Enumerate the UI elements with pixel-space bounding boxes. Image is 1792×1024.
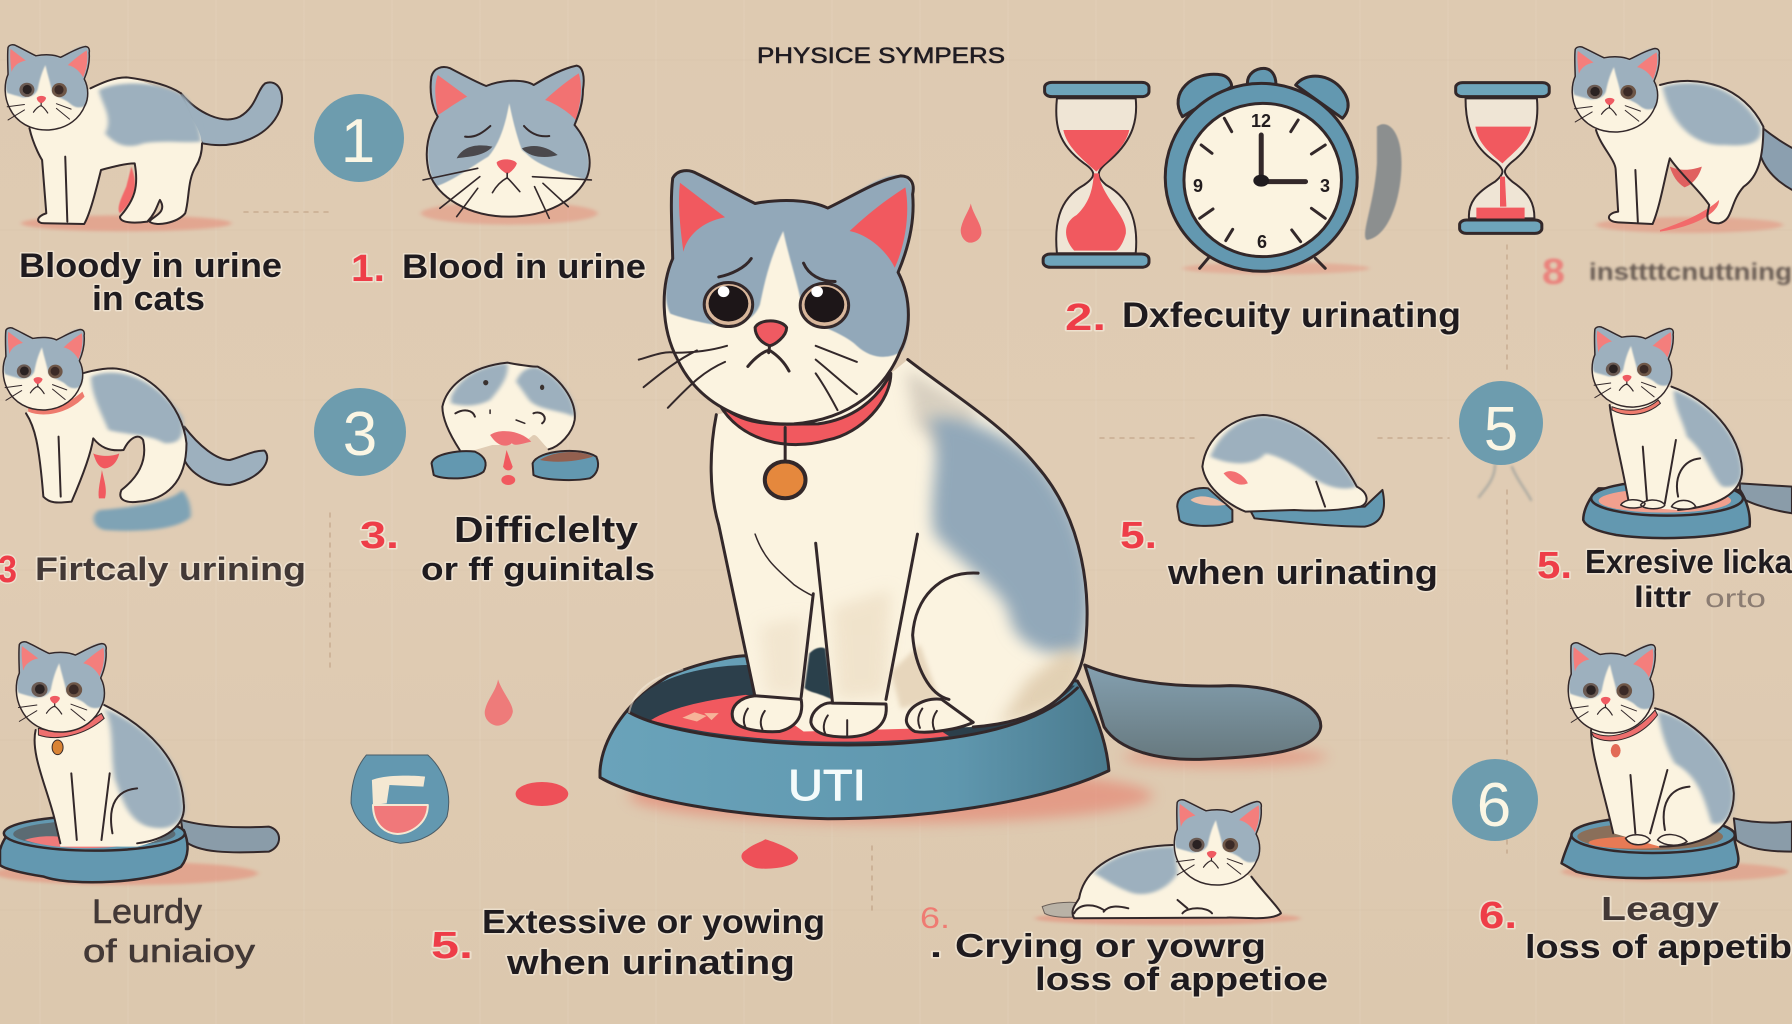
label: 2. Dxfecuity urinating: Dxfecuity urinating: [1122, 296, 1461, 335]
label: 6. Crying or yowrg loss of appetioe: [920, 902, 1328, 997]
label: blurred right label: insttttcnuttning: [1589, 259, 1792, 286]
label: 5. when urinating: [1120, 515, 1438, 592]
label: 6. Leagy loss of appetib: [1479, 890, 1792, 965]
label: blurred right label: [1542, 251, 1792, 292]
label: 5. Extessive or yowing when urinating: Extessive or yowing: [482, 903, 825, 940]
label: Leurdy of uniaioy: of uniaioy: [83, 933, 255, 969]
label: Bloody in urine in cats: Bloody in urine: [19, 247, 282, 285]
label: 3. Firtcaly urining: [0, 549, 306, 591]
illustration: hunched cat over tray: [1177, 415, 1384, 527]
label: 6. Leagy loss of appetib: loss of appetib: [1525, 928, 1792, 965]
number badge 3: 3: [343, 400, 377, 469]
icon: alarm clock: 9: [1193, 176, 1203, 196]
number badge 1: [314, 94, 404, 182]
icon: alarm clock: 12: [1251, 111, 1271, 131]
icon: small hourglass: [1456, 83, 1549, 233]
label: 3. Difficlelty or ff guinitals: Difficlelty: [454, 509, 638, 550]
label: 5. Extessive or yowing when urinating: 5.: [431, 925, 473, 967]
label: 5. Exresive licka littr orto: [1537, 543, 1792, 614]
label: 5. when urinating: when urinating: [1167, 554, 1438, 592]
label: 6. Crying or yowrg loss of appetioe: Crying or yowrg: [955, 927, 1266, 964]
title: PHYSICE SYMPERS: [757, 43, 1005, 68]
label: UTI: UTI: [788, 761, 866, 810]
number badge 5: [1459, 381, 1543, 500]
illustration: crying cat face: [421, 66, 598, 225]
number badge 5: 5: [1484, 395, 1518, 464]
icon: alarm clock: 6: [1257, 232, 1267, 252]
label: 6. Crying or yowrg loss of appetioe: 6.: [920, 902, 950, 935]
illustration: lying cat: [1035, 800, 1301, 925]
icon: blood drops: [485, 679, 798, 869]
label: 3. Difficlelty or ff guinitals: [360, 509, 655, 587]
label: 6. Crying or yowrg loss of appetioe: loss of appetioe: [1035, 961, 1328, 997]
illustration: cat head bowed over bowls: [432, 363, 598, 485]
icon: large hourglass: [1043, 82, 1149, 267]
icon: blood sample cup: [351, 755, 449, 843]
number badge 6: [1452, 759, 1538, 841]
illustration: cat sitting in tray, bottom right: [1562, 643, 1792, 882]
label: 3. Difficlelty or ff guinitals: 3.: [360, 515, 399, 557]
label: Bloody in urine in cats: in cats: [92, 280, 205, 318]
label: Leurdy of uniaioy: [83, 893, 255, 969]
number badge 6: 6: [1477, 771, 1511, 840]
label: 5. Exresive licka littr orto: 5.: [1537, 545, 1572, 587]
label: 5. when urinating: 5.: [1120, 515, 1157, 557]
label: 6. Leagy loss of appetib: 6.: [1479, 895, 1517, 937]
icon: alarm clock: 3: [1320, 176, 1330, 196]
label: Leurdy of uniaioy: Leurdy: [92, 893, 202, 931]
label: 3. Firtcaly urining: Firtcaly urining: [35, 551, 306, 587]
icon: blood drop near main cat: [961, 203, 981, 243]
label: 5. Exresive licka littr orto: orto: [1705, 583, 1766, 613]
label: 1. Blood in urine: 1.: [351, 248, 385, 290]
illustration: cat sitting in tray, middle right: [1583, 327, 1792, 538]
label: 6. Crying or yowrg loss of appetioe: .: [930, 928, 942, 964]
label: 5. Extessive or yowing when urinating: when urinating: [506, 944, 795, 982]
label: 5. Extessive or yowing when urinating: [431, 903, 825, 982]
label: 1. Blood in urine: Blood in urine: [402, 248, 646, 286]
illustration: main cat sitting in UTI litter tray: [600, 171, 1327, 823]
illustration: cat sitting in tray, bottom left: [0, 642, 279, 885]
label: 2. Dxfecuity urinating: 2.: [1065, 297, 1106, 339]
label: 6. Leagy loss of appetib: Leagy: [1601, 890, 1720, 927]
label: 3. Difficlelty or ff guinitals: or ff guinitals: [421, 551, 655, 587]
label: blurred right label: 8: [1542, 251, 1565, 292]
label: 5. Exresive licka littr orto: littr: [1634, 581, 1691, 614]
icon: alarm clock: [1165, 68, 1402, 274]
illustration: cat with litter tray, middle left: [3, 328, 267, 531]
number badge 1: 1: [341, 107, 375, 176]
number badge 3: [314, 388, 406, 476]
illustration: standing cat top right: [1572, 47, 1792, 233]
illustration: standing cat top left: [5, 45, 282, 231]
label: Bloody in urine in cats: [19, 247, 282, 318]
